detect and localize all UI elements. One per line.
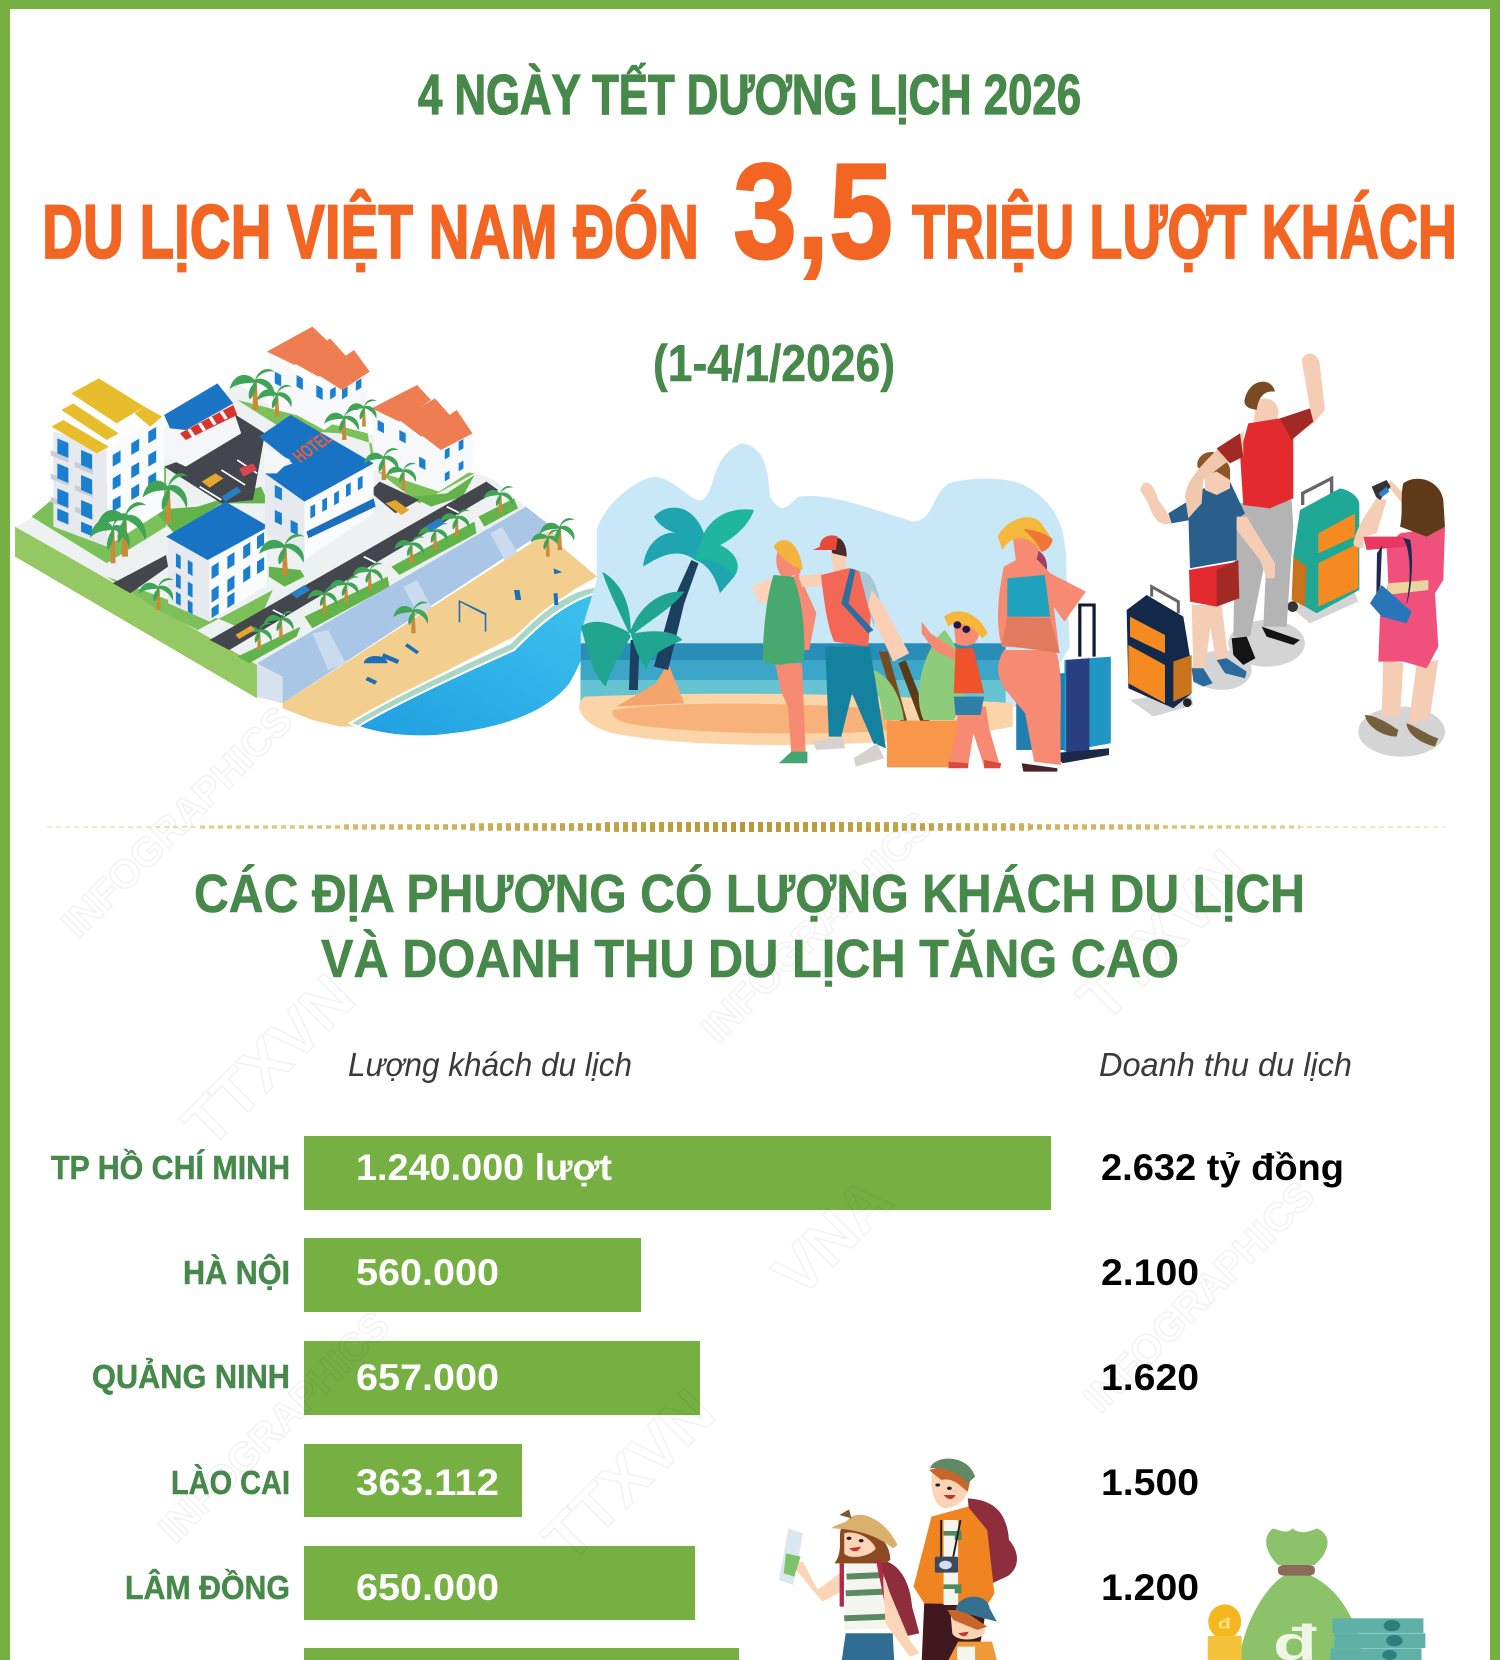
watermarks: VNA — [759, 1163, 905, 1310]
navy suitcase — [1152, 587, 1178, 613]
bar chart — [51, 1136, 1344, 1660]
man's arm over boy — [1185, 432, 1243, 518]
child suitcase and plants — [879, 652, 907, 722]
watermarks: INFOGRAPHICS — [150, 1303, 398, 1551]
illustration: isometric beach city: HOTEL — [289, 428, 337, 467]
boy — [1192, 605, 1228, 668]
illustration: money bag — [1208, 1528, 1425, 1660]
row: Hà Nội: 560.000 — [356, 1252, 499, 1293]
woman — [1382, 660, 1438, 727]
illustration: isometric beach city — [15, 327, 597, 735]
row: TP Hồ Chí Minh: 1.240.000 lượt — [356, 1147, 612, 1188]
ground — [16, 383, 526, 665]
header: revenue: Doanh thu du lịch — [1099, 1046, 1352, 1083]
beach — [283, 530, 597, 727]
row: Lâm Đồng — [125, 1546, 1199, 1620]
sky blob — [581, 443, 1070, 707]
hotel — [265, 473, 304, 560]
man — [1233, 500, 1293, 637]
teal suitcase — [1303, 478, 1332, 505]
shop — [164, 410, 241, 467]
beach people — [364, 568, 562, 685]
orange-roof house 2 — [374, 410, 473, 492]
child — [948, 1642, 997, 1660]
mother — [878, 1560, 919, 1637]
illustration: backpackers — [779, 1459, 1017, 1660]
watermarks — [53, 698, 1323, 1575]
sand — [579, 694, 1013, 745]
watermarks: INFOGRAPHICS — [53, 698, 301, 946]
row: Hà Nội: 2.100 — [1101, 1252, 1199, 1293]
watermarks: TTXVN — [529, 1376, 728, 1575]
divider — [47, 826, 1445, 828]
bag top — [1266, 1528, 1328, 1565]
watermarks: INFOGRAPHICS — [693, 803, 941, 1051]
row: Lào Cai — [171, 1444, 1199, 1517]
section heading — [194, 864, 1305, 989]
row: TP Hồ Chí Minh: 2.632 tỷ đồng — [1101, 1147, 1344, 1188]
sea wall — [257, 507, 552, 703]
row: Quảng Ninh: QUẢNG NINH — [92, 1358, 290, 1395]
row: TP Hồ Chí Minh: TP HỒ CHÍ MINH — [51, 1149, 290, 1186]
shadows — [1130, 690, 1193, 717]
father backpack — [968, 1498, 1017, 1583]
palms — [142, 473, 188, 523]
lower blue building — [168, 540, 210, 622]
palm big — [654, 560, 699, 670]
father — [922, 1603, 987, 1660]
row: TP Hồ Chí Minh — [51, 1136, 1344, 1210]
bag tie — [1278, 1565, 1315, 1576]
heading line 2: VÀ DOANH THU DU LỊCH TĂNG CAO — [321, 929, 1179, 989]
yellow apartment — [53, 432, 107, 547]
date: (1-4/1/2026) — [653, 335, 895, 393]
child — [948, 707, 1000, 767]
row: next bar — [304, 1648, 739, 1660]
heading line 1: CÁC ĐỊA PHƯƠNG CÓ LƯỢNG KHÁCH DU LỊCH — [194, 864, 1305, 924]
row: Lâm Đồng: 1.200 — [1101, 1567, 1199, 1608]
row: Lâm Đồng: LÂM ĐỒNG — [125, 1569, 290, 1606]
watermarks: TTXVN — [1064, 836, 1263, 1035]
roads — [113, 413, 498, 650]
row: Quảng Ninh: 1.620 — [1101, 1357, 1199, 1398]
row: Hà Nội — [183, 1238, 1199, 1312]
cars — [202, 473, 409, 639]
row: Lâm Đồng: 650.000 — [356, 1567, 499, 1608]
illustration: money bag: đ — [1218, 1615, 1232, 1632]
column headers — [348, 1046, 1352, 1083]
row: Lào Cai: 363.112 — [356, 1462, 499, 1503]
orange-roof house 1 — [269, 353, 368, 430]
woman in green — [775, 663, 806, 753]
coin stack — [1208, 1636, 1242, 1660]
palm small — [629, 640, 640, 690]
row: Quảng Ninh: 657.000 — [356, 1357, 499, 1398]
bag body — [1239, 1575, 1363, 1660]
coin — [1208, 1604, 1241, 1639]
platform side — [15, 527, 257, 698]
tall woman — [998, 650, 1061, 765]
row: Hà Nội: HÀ NỘI — [183, 1253, 290, 1291]
grass strips — [154, 475, 518, 663]
watermarks: INFOGRAPHICS — [1075, 1173, 1323, 1421]
suitcases — [1016, 673, 1077, 750]
title — [42, 62, 1457, 287]
title line 1: 4 NGÀY TẾT DƯƠNG LỊCH 2026 — [418, 62, 1081, 127]
big number: 3,5 — [733, 135, 893, 287]
illustration: beach family — [579, 443, 1111, 772]
illustration: family with luggage — [1127, 353, 1445, 757]
man in red — [825, 647, 886, 748]
row: Quảng Ninh — [92, 1341, 1199, 1415]
row: Lào Cai: LÀO CAI — [171, 1464, 290, 1501]
sea — [352, 587, 597, 735]
header: visitors: Lượng khách du lịch — [348, 1046, 632, 1083]
row: Lào Cai: 1.500 — [1101, 1462, 1199, 1503]
sea — [581, 643, 1006, 703]
title line 2 left: DU LỊCH VIỆT NAM ĐÓN — [42, 189, 699, 275]
banknotes — [1330, 1618, 1425, 1660]
watermarks: TTXVN — [169, 961, 368, 1160]
